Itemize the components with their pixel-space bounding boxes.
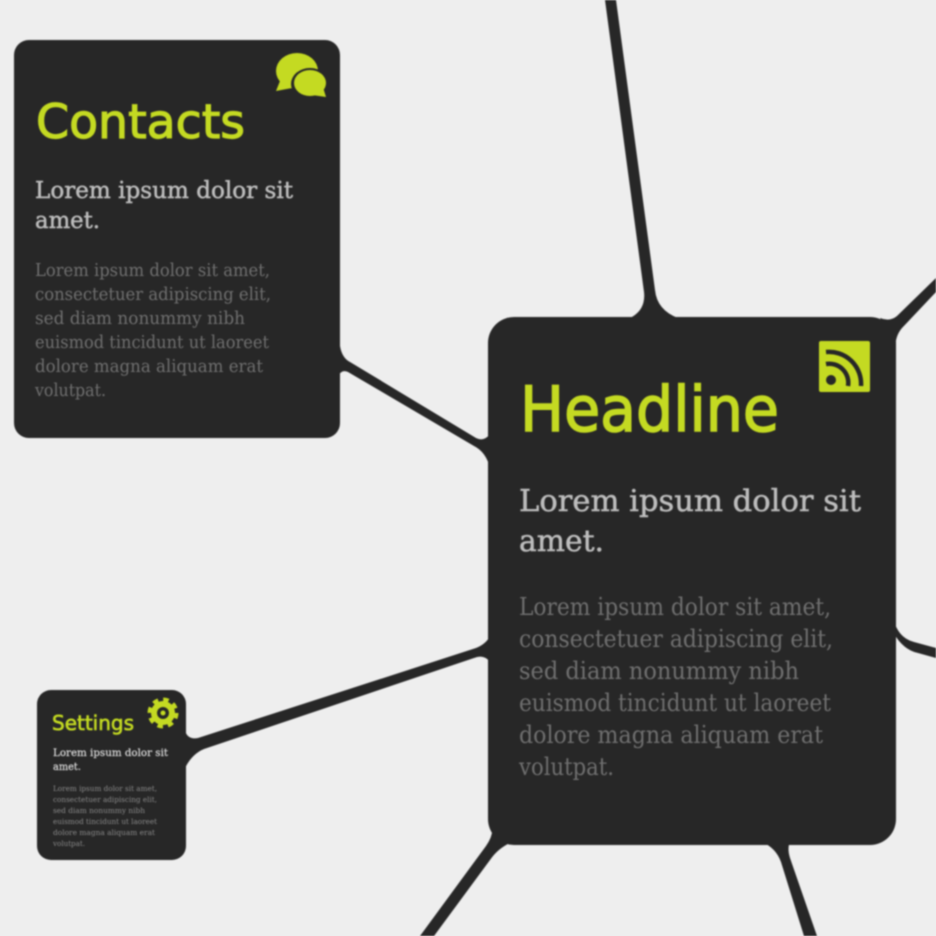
panel: Settings: [37, 690, 186, 860]
body text: dolore magna aliquam erat: [53, 828, 155, 837]
subheading: Lorem ipsum dolor sit: [35, 178, 294, 204]
body text: Lorem ipsum dolor sit amet,: [519, 593, 831, 621]
body text: sed diam nonummy nibh: [35, 308, 245, 329]
subheading: amet.: [519, 524, 604, 559]
heading: Contacts: Contacts: [36, 95, 245, 150]
body text: volutpat.: [34, 380, 106, 401]
icon: speech bubbles: [276, 53, 329, 100]
body text: sed diam nonummy nibh: [519, 657, 799, 685]
body text: Lorem ipsum dolor sit amet,: [35, 260, 270, 281]
body text: volutpat.: [518, 753, 614, 781]
body text: consectetuer adipiscing elit,: [35, 284, 271, 305]
body text: euismod tincidunt ut laoreet: [519, 689, 831, 717]
body text: volutpat.: [52, 839, 85, 848]
body text: consectetuer adipiscing elit,: [519, 625, 833, 653]
panel: Headline: [488, 317, 896, 845]
subheading: [35, 178, 294, 234]
icon: RSS feed: [819, 341, 870, 392]
body text: euismod tincidunt ut laoreet: [53, 817, 157, 826]
subheading: amet.: [35, 208, 100, 234]
subheading: Lorem ipsum dolor sit: [519, 484, 861, 519]
subheading: Lorem ipsum dolor sit: [53, 747, 169, 759]
icon: gear: [150, 700, 176, 726]
body text: [52, 784, 157, 848]
body text: euismod tincidunt ut laoreet: [35, 332, 270, 353]
body text: [518, 593, 833, 781]
subheading: amet.: [53, 761, 81, 773]
body text: sed diam nonummy nibh: [53, 806, 145, 815]
panel: Contacts: [14, 40, 340, 438]
body text: dolore magna aliquam erat: [519, 721, 823, 749]
subheading: [519, 484, 861, 559]
body text: [34, 260, 271, 401]
body text: consectetuer adipiscing elit,: [53, 795, 157, 804]
body text: Lorem ipsum dolor sit amet,: [53, 784, 157, 793]
body text: dolore magna aliquam erat: [35, 356, 264, 377]
subheading: [53, 747, 169, 773]
heading: Headline: Headline: [520, 373, 779, 446]
heading: Settings: Settings: [52, 711, 134, 735]
